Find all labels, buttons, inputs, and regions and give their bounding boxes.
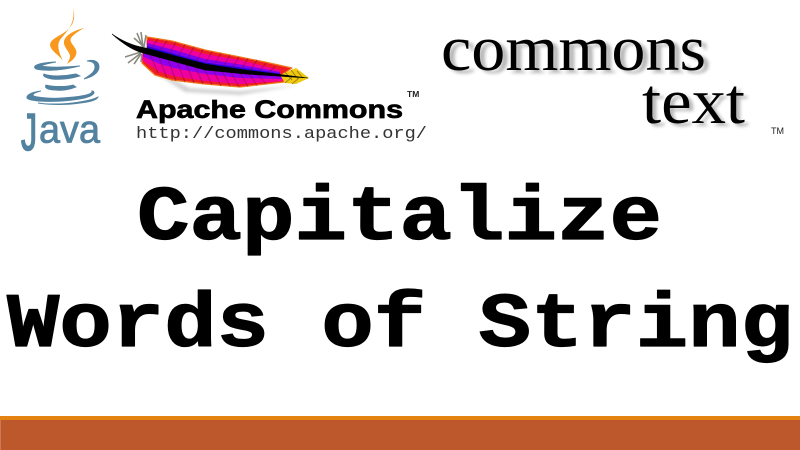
icon: Apache feather <box>112 32 309 95</box>
Java wordmark <box>21 104 100 162</box>
Apache Commons wordmark: Apache Commons <box>136 96 403 124</box>
icon: Java flame <box>50 8 84 64</box>
text word: text <box>642 66 745 138</box>
feather yellow tip <box>280 68 309 84</box>
trademark: TM <box>771 126 784 136</box>
footer band <box>0 416 800 450</box>
Java wordmark: ava <box>39 108 100 152</box>
upper vane <box>147 37 292 76</box>
commons word: commons <box>441 13 706 85</box>
URL: http://commons.apache.org/ <box>136 125 427 144</box>
commons shadow: commons <box>446 16 711 88</box>
icon: Java coffee cup <box>27 60 99 104</box>
logo: commons text <box>441 13 784 141</box>
logo: Apache Commons <box>112 32 427 144</box>
text shadow: text <box>646 69 749 141</box>
title line 2: Words of String <box>7 283 793 370</box>
lower vane <box>142 52 284 87</box>
Java wordmark: J <box>21 104 37 162</box>
feather shaft <box>112 34 308 78</box>
feather barb stripes <box>150 39 275 87</box>
title <box>7 176 793 370</box>
trademark: TM <box>407 89 419 99</box>
logo: Java <box>21 8 100 162</box>
title line 1: Capitalize <box>137 176 662 263</box>
